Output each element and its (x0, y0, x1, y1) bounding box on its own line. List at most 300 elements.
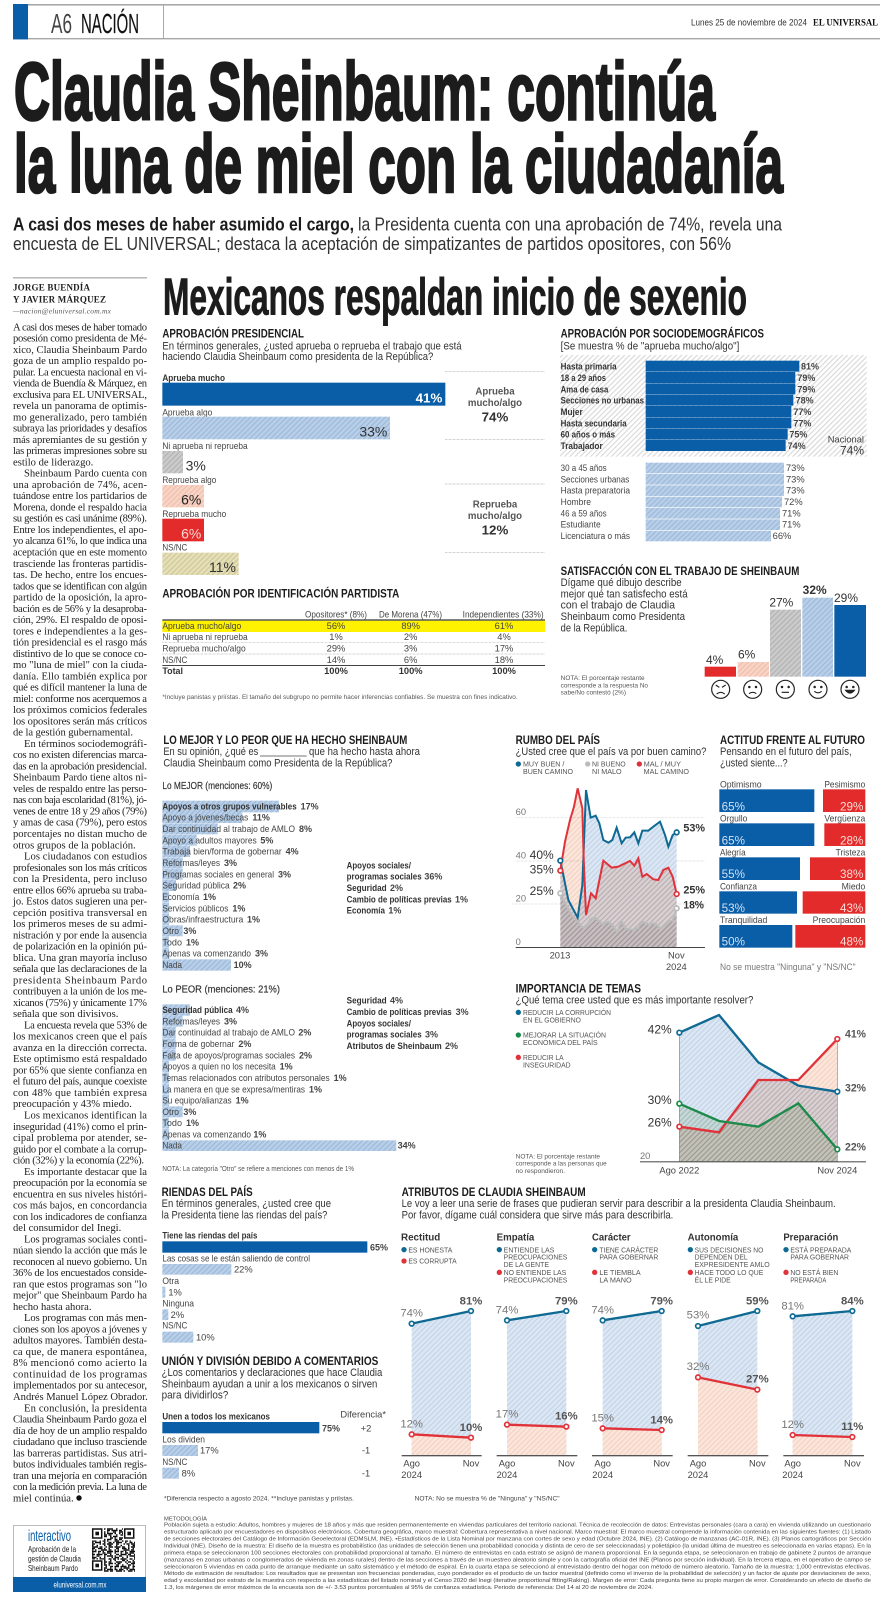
table: 17% (495, 644, 513, 654)
table: 29% (327, 644, 345, 654)
panel: lo mejor y lo peor (162, 734, 469, 1173)
footnote: nota: NOTA: No se muestra % de "Ninguna" y "NS/NC" (415, 1496, 560, 1503)
article body column: exclusiva para EL UNIVERSAL, (13, 390, 147, 401)
chart: rectitud: Nov (463, 1459, 480, 1469)
bar chart: below national: 71% (782, 508, 801, 518)
bar chart: above national: 60 años o más (561, 430, 615, 440)
legend: BUEN CAMINO (523, 767, 573, 776)
line chart: rumbo del país: 20 (516, 894, 526, 904)
bar chart: lo mejor: Trabaja bien/forma de gobernar (162, 847, 282, 857)
table: Independientes (33%) (463, 610, 544, 620)
legend: NI MALO (592, 767, 622, 776)
question: ¿Usted cree que el país va por buen camino? (516, 746, 706, 758)
legend (516, 759, 689, 776)
bar chart: below national: 72% (784, 497, 803, 507)
bar chart: lo peor: Su equipo/alianzas (162, 1096, 232, 1106)
panel: aprobación por sociodemográficos (560, 327, 867, 541)
article body column: presidenta Sheinbaum Pardo (13, 975, 147, 986)
chart: empatía: DE LA GENTE (504, 1260, 549, 1269)
chart: preparación: PREPARADA (790, 1275, 827, 1284)
bar chart: approval: 33% (359, 424, 387, 440)
note: corresponde a la respuesta No (561, 682, 648, 689)
section name: NACIÓN (81, 8, 139, 39)
bar chart: lo mejor: Dar continuidad al trabajo de AMLO (162, 824, 295, 834)
legend: MUY BUEN / (523, 759, 565, 768)
article body column: de la gestión gubernamental. (13, 728, 133, 739)
bar chart: riendas: NS/NC (162, 1321, 188, 1331)
question (402, 1198, 836, 1221)
article body column: por 65% que siente confianza en (13, 1066, 148, 1076)
line chart: importancia de temas: 32% (845, 1083, 866, 1095)
article body column: distintivo de lo que se conoce co- (13, 649, 147, 660)
article body column: reconocen al nuevo gobierno. Un (13, 1257, 148, 1268)
panel: importancia de temas (516, 982, 866, 1175)
diverging bars: sentiments: Tranquilidad (720, 915, 767, 925)
article body column: núan siendo la acción que más le (13, 1246, 147, 1257)
article body column: blica. Una gran mayoría incluso (13, 953, 147, 964)
bar chart: riendas: 1% (168, 1287, 182, 1297)
chart: rectitud: Ago (403, 1459, 420, 1469)
page header strip (13, 4, 880, 39)
bar chart: lo peor: 3% (224, 1016, 237, 1026)
article body column: cepción positiva transversal en (13, 908, 148, 919)
note: NOTA: El porcentaje restante (561, 675, 645, 682)
chart: empatía: Empatía (497, 1233, 535, 1244)
article body column: encuentra en sus niveles históri- (13, 1189, 147, 1200)
icon: blue section block (13, 4, 28, 39)
chart: rectitud (400, 1233, 482, 1480)
chart: empatía: PREOCUPACIONES (504, 1253, 567, 1262)
bar chart: approval: 41% (416, 391, 442, 406)
bar chart: below national: Hasta preparatoria (561, 486, 631, 496)
legend: REDUCIR LA (523, 1053, 564, 1062)
article body column: los mexicanos creen que el país (13, 1032, 147, 1043)
interactive description: gestión de Claudia (28, 1554, 81, 1564)
article body column: trasciende las fronteras partidis- (13, 559, 147, 570)
diverging bars: sentiments: Confianza (720, 881, 758, 891)
subtitle deck (13, 214, 783, 254)
grouped totals: lo mejor: programas sociales (347, 872, 422, 882)
line chart: rumbo del país: 25% (530, 884, 554, 898)
heading: APROBACIÓN PRESIDENCIAL (162, 327, 304, 340)
article body column: ciones son los apoyos a jóvenes y (13, 1324, 148, 1335)
bar chart: unión y división: Los dividen (162, 1434, 205, 1444)
bar chart: lo mejor: Reformas/leyes (162, 858, 220, 868)
chart: preparación: 81% (781, 1300, 804, 1312)
diverging bars: sentiments: 65% (722, 800, 745, 813)
bar chart: below national: 71% (782, 520, 801, 530)
chart: rectitud: Rectitud (401, 1233, 440, 1244)
article body column: subraya las prioridades y desafíos (13, 424, 147, 435)
line chart: rumbo del país: 60 (516, 807, 526, 817)
grouped totals: lo mejor: 2% (390, 883, 403, 893)
bar chart: satisfaction: 32% (803, 583, 827, 597)
legend: NI BUENO (592, 759, 626, 768)
article body column: Es importante destacar que la (24, 1167, 147, 1178)
interactive description: Aprobación de la (28, 1544, 76, 1554)
bar chart: lo mejor: 11% (252, 813, 270, 823)
bar chart: approval: 3% (186, 458, 206, 474)
bar chart: lo mejor: 2% (233, 881, 246, 891)
chart: preparación: 84% (841, 1295, 864, 1307)
methodology block (164, 1516, 872, 1591)
article body column: ca que, de manera espontánea, (13, 1347, 147, 1358)
article body column: mo "luna de miel" con la ciuda- (13, 660, 147, 671)
methodology block: primera etapa se seleccionaron 100 secciones electorales con probabilidad proporcional al tamaño. El número de entrevistas en cada estrato se asignó de manera proporcional. En la segunda etapa, se seleccionaron en trabajo de gabinete 2 puntos de arranque (164, 1550, 871, 1556)
bar chart: lo peor: 1% (309, 1084, 322, 1094)
bar chart: above national (560, 355, 867, 458)
chart: autonomía: SUS DECISIONES NO (695, 1245, 763, 1254)
article body column: más apremiantes de su gestión y (13, 435, 148, 446)
line chart: importancia de temas: 41% (845, 1029, 866, 1041)
question: con el trabajo de Claudia (561, 600, 676, 612)
bar chart: above national: Mujer (561, 407, 583, 417)
table: Total (162, 666, 183, 676)
chart: autonomía: 2024 (688, 1470, 708, 1480)
article body column: Entre los independientes, el apo- (13, 525, 147, 536)
article body column: preocupación por la economía se (13, 1178, 147, 1189)
chart: rectitud: 2024 (401, 1470, 422, 1480)
bar chart: lo mejor: Economía (162, 892, 200, 902)
chart: autonomía (687, 1233, 770, 1480)
heading: ACTITUD FRENTE AL FUTURO (720, 734, 865, 747)
footnote: diferencia: *Diferencia respecto a agosto 2024. **Incluye panistas y priístas. (164, 1496, 354, 1503)
chart: carácter: TIENE CARÁCTER (599, 1245, 659, 1254)
callout: approve / disapprove totals: 74% (482, 410, 508, 425)
interactive description: Sheinbaum Pardo (28, 1563, 78, 1573)
chart: carácter: 74% (591, 1304, 614, 1316)
question (162, 1198, 331, 1221)
article body column: vienda de Buendía & Márquez, en (13, 379, 148, 390)
diverging bars: sentiments: Pesimismo (824, 780, 865, 790)
table: 1% (329, 632, 343, 642)
bar chart: lo peor: 2% (299, 1050, 312, 1060)
table: Opositores* (8%) (305, 610, 367, 620)
methodology block: Individual (INE). Diseño de la muestra: El diseño de la muestra es probabilístico (las unidades de selección tienen una probabilidad conocida y distinta de cero de ser seleccionadas) y polietápico (la unidad última de muestreo es seleccionada en varias etapas). En la (164, 1544, 872, 1550)
article body column: Sheinbaum Pardo tiene altos ni- (13, 773, 147, 784)
article body column: cipal problema por atender, se- (13, 1133, 147, 1144)
note: NOTA: El porcentaje restante (516, 1153, 600, 1160)
question (561, 577, 688, 634)
subheading: lo peor: Lo PEOR (menciones: 21%) (162, 984, 280, 995)
icon: satisfied face (809, 680, 827, 698)
methodology block: METODOLOGÍA (164, 1516, 207, 1523)
article body column: mo generalizado, pero también (13, 412, 148, 423)
panel: aprobación presidencial (162, 327, 545, 575)
byline: Y JAVIER MÁRQUEZ (13, 295, 106, 305)
table: NS/NC (162, 655, 188, 665)
article body column: nistración y por ende la ausencia (13, 930, 147, 941)
article body column: los próximos comicios federales (13, 705, 147, 716)
chart: autonomía: ÉL LE PIDE (695, 1275, 731, 1284)
byline: —nacion@eluniversal.com.mx (12, 307, 112, 316)
article body column: el futuro del país, aunque coexiste (13, 1077, 147, 1088)
chart: carácter: Ago (594, 1459, 611, 1469)
grouped totals: lo peor: Cambio de políticas previas (347, 1007, 452, 1017)
bar chart: lo peor: 1% (236, 1096, 249, 1106)
article body column: goza de un amplio respaldo po- (13, 356, 147, 367)
question: Claudia Sheinbaum como Presidenta de la República? (163, 757, 392, 769)
chart: carácter: PARA GOBERNAR (599, 1253, 659, 1262)
grouped totals: lo peor: 3% (425, 1030, 438, 1040)
article body column: cos más bajos, en concordancia (13, 1201, 147, 1212)
bar chart: above national: 74% (788, 441, 806, 451)
bar chart: unión y división: -1 (362, 1468, 370, 1478)
bar chart: lo mejor: 3% (255, 949, 268, 959)
article body column: y amas de casa (79%), pero estos (13, 818, 147, 829)
national reference label: 74% (840, 444, 864, 458)
grouped totals: lo mejor (347, 860, 468, 916)
question (163, 746, 421, 769)
table: 18% (495, 655, 513, 665)
methodology block: estructurado aplicado por encuestadores en dispositivos electrónicos. Cobertura geográfica, marco muestral: Cobertura representativa a nivel nacional. Marco muestral: El marco muestral comprende la información contenida en las siguientes fuentes: (1) Listado (164, 1530, 871, 1536)
diverging bars: sentiments: Alegría (720, 847, 746, 857)
bar chart: approval: 11% (209, 559, 236, 575)
heading: RIENDAS DEL PAÍS (162, 1186, 253, 1199)
subtitle deck: A casi dos meses de haber asumido el cargo, (13, 214, 354, 235)
table (162, 610, 545, 676)
question: la Presidenta tiene las riendas del país? (162, 1209, 327, 1221)
diverging bars: sentiments: 38% (840, 868, 863, 881)
bar chart: riendas: Tiene las riendas del país (162, 1230, 257, 1240)
table: De Morena (47%) (379, 610, 442, 620)
bar chart: lo peor: 1% (280, 1062, 293, 1072)
table: 100% (324, 666, 349, 676)
bar chart: lo mejor: 1% (203, 892, 216, 902)
panel: aprobación por identificación partidista (162, 587, 545, 701)
grouped totals: lo mejor: 36% (424, 872, 442, 882)
callout: approve / disapprove totals: 12% (482, 523, 508, 538)
methodology block: (manzanas en zonas urbanas o conglomerados de vivienda en zonas rurales) dentro de las secciones a través de un muestreo aleatorio simple y con la cartografía oficial del INE (Planos por sección individual). En la tercera etapa, en el operativo de campo se (164, 1557, 871, 1563)
article body column: A casi dos meses de haber tomado (13, 322, 147, 333)
chart: preparación: NO ESTÁ BIEN (790, 1268, 838, 1277)
chart: rectitud: ES HONESTA (408, 1245, 453, 1254)
bar chart: unión y división: 75% (322, 1423, 340, 1433)
bar chart: lo peor: Falta de apoyos/programas sociales (162, 1050, 295, 1060)
article body column: inseguridad (41%) como el prin- (13, 1122, 147, 1133)
article body column: otros grupos de la población. (13, 840, 136, 851)
chart: autonomía: Ago (690, 1459, 706, 1469)
article body column: Los programas con más men- (24, 1313, 147, 1324)
bar chart: lo mejor: 1% (186, 937, 199, 947)
bar chart: lo peor: 2% (238, 1039, 251, 1049)
chart: carácter: LE TIEMBLA (599, 1268, 641, 1277)
line chart: rumbo del país: 18% (683, 899, 704, 911)
question: ¿Qué tema cree usted que es más importante resolver? (516, 994, 753, 1006)
line chart: importancia de temas (640, 1015, 866, 1175)
article body column: miel continúa. (13, 1493, 74, 1504)
diverging bars: sentiments (719, 780, 866, 949)
chart: rectitud: 10% (460, 1422, 482, 1434)
bar chart: lo peor: 1% (334, 1073, 347, 1083)
table: 2% (404, 632, 417, 642)
subheading: [Se muestra % de "aprueba mucho/algo"] (561, 340, 739, 352)
article body column: ción, 29%. El respaldo de oposi- (13, 615, 147, 626)
article body column: nas con baja escolaridad (81%), jó- (13, 795, 147, 806)
chart: empatía: ENTIENDE LAS (504, 1245, 554, 1254)
article body column: porcentajes no distan mucho de (13, 829, 147, 840)
article body column: con los indicadores de confianza (13, 1212, 147, 1223)
article body column: pular. La encuesta nacional en vi- (13, 367, 147, 378)
bar chart: lo mejor: Apoyo a adultos mayores (162, 835, 257, 845)
article body column: Andrés Manuel López Obrador. (13, 1392, 148, 1403)
bar chart: lo peor: 3% (183, 1107, 196, 1117)
interactive description (28, 1544, 81, 1573)
line chart: rumbo del país: 25% (683, 885, 705, 897)
bar chart: riendas: Otra (162, 1276, 180, 1286)
icon: QR code (91, 1528, 136, 1572)
subheading: lo mejor: Lo MEJOR (menciones: 60%) (162, 781, 272, 792)
bar chart: unión y división: 8% (182, 1468, 195, 1478)
diverging bars: sentiments: 29% (840, 800, 863, 813)
chart: carácter: 79% (650, 1295, 673, 1307)
grouped totals: lo mejor: Apoyos sociales/ (347, 860, 411, 870)
methodology block: Población sujeta a estudio: Adultos, hombres y mujeres de 18 años y más que residen permanentemente en viviendas particulares del territorio nacional. Técnica de recolección de datos: Entrevistas personales (cara a cara) en vivienda utilizando un cuestionario (164, 1523, 871, 1529)
bar chart: lo mejor: Todo (162, 937, 182, 947)
chart: autonomía: 27% (746, 1374, 769, 1386)
bar chart: riendas: 65% (370, 1243, 388, 1253)
bar chart: lo mejor: 17% (301, 801, 319, 811)
legend (516, 1008, 611, 1069)
line chart: rumbo del país: Nov (668, 950, 685, 960)
question (162, 1367, 383, 1402)
article body column: tuándose entre los partidarios de (13, 491, 147, 502)
note: No se muestra "Ninguna" y "NS/NC" (720, 962, 856, 972)
article body column: tión presidencial es el rasgo más (13, 638, 147, 649)
table: 3% (404, 644, 417, 654)
bar chart: lo mejor: 1% (247, 915, 260, 925)
bar chart: lo mejor: 4% (286, 847, 299, 857)
diverging bars: sentiments: 43% (840, 902, 863, 915)
national reference label (828, 435, 864, 458)
bar chart: lo peor: 34% (398, 1141, 416, 1151)
chart: preparación: 11% (841, 1421, 863, 1433)
chart: preparación: Ago (784, 1459, 801, 1469)
bar chart: below national: Hombre (561, 497, 591, 507)
grouped totals: lo peor: 2% (445, 1041, 458, 1051)
bar chart: below national: Estudiante (561, 520, 601, 530)
bar chart: lo peor: 2% (298, 1028, 311, 1038)
question: Sheinbaum ayudan a unir a los mexicanos o sirven (162, 1378, 377, 1390)
subtitle deck: la Presidenta cuenta con una aprobación de 74%, revela una (358, 214, 783, 235)
bar chart: above national: 78% (796, 396, 814, 406)
masthead: EL UNIVERSAL (813, 18, 878, 28)
bar chart: satisfaction: 27% (769, 596, 794, 610)
article body column: señala que son divisivos. (13, 1009, 118, 1020)
chart: empatía (496, 1233, 578, 1480)
question (720, 746, 852, 769)
chart: carácter: Nov (653, 1459, 670, 1469)
diverging bars: sentiments: 65% (722, 834, 745, 847)
article body column: En términos sociodemográfi- (24, 739, 147, 750)
icon: neutral face (776, 680, 794, 698)
article body column: preocupación y 43% miedo. (13, 1099, 132, 1110)
article body column: entre ellos 66% aprueba su traba- (13, 885, 147, 896)
line chart: rumbo del país: 53% (683, 823, 705, 835)
question: Por favor, dígame cuál considera que sirve más para describirla. (402, 1209, 673, 1221)
bar chart: lo mejor: 10% (234, 960, 252, 970)
methodology block: de secciones electorales del Catálogo de Información Geoelectoral (EDMSLM, INE). •Estadísticos de la Lista Nominal por manzana con cortes de sexo y edad (Octubre 2024, INE). (2) Catálogo de manzanas (AC-01R, INE). (3) Planos cartográficos por Sección (164, 1537, 871, 1543)
article body column: butos individuales también regis- (13, 1460, 147, 1471)
chart: autonomía: 32% (687, 1361, 709, 1373)
article body column: xico, Claudia Sheinbaum Pardo (13, 345, 147, 356)
bar chart: unión y división: -1 (362, 1446, 370, 1456)
table: 100% (399, 666, 423, 676)
chart: preparación: 2024 (782, 1470, 803, 1480)
bar chart: above national: Secciones no urbanas (561, 396, 644, 406)
article body column: mejor" que Sheinbaum Pardo ha (13, 1291, 147, 1302)
bar chart: unión y división: 17% (200, 1446, 219, 1456)
article body column: Los ciudadanos con estudios (24, 852, 147, 862)
chart: rectitud: 74% (400, 1308, 423, 1320)
bar chart: lo peor: 1% (253, 1129, 266, 1139)
bar chart: lo mejor: Nada (162, 960, 183, 970)
bar chart: riendas: Las cosas se le están saliendo de control (162, 1253, 310, 1263)
bar chart: above national: Hasta secundaria (561, 418, 627, 428)
article body column: tran una mejoría en comparación (13, 1471, 148, 1482)
chart: empatía: PREOCUPACIONES (504, 1275, 567, 1284)
bar chart: lo peor: Nada (162, 1141, 183, 1151)
chart: empatía: 17% (496, 1409, 518, 1421)
line chart: rumbo del país: 40% (530, 848, 554, 862)
chart: carácter: Carácter (592, 1233, 631, 1244)
table: 89% (401, 621, 420, 631)
panel: satisfacción con el trabajo (561, 565, 866, 698)
bar chart: approval: 6% (181, 492, 201, 508)
article body column: implementados por su antecesor, (13, 1381, 147, 1392)
bar chart: lo peor: La manera en que se expresa/mentiras (162, 1084, 305, 1094)
article body column: das en la aprobación presidencial. (13, 761, 147, 772)
bar chart: lo mejor: 8% (299, 824, 312, 834)
article body column: los primeros meses de su admi- (13, 919, 147, 930)
heading: APROBACIÓN POR SOCIODEMOGRÁFICOS (561, 327, 764, 340)
article body column: tados que se identifican con algún (13, 581, 148, 592)
bar chart: unión y división: NS/NC (162, 1457, 188, 1467)
article body column: jo. Estos datos sugieren una per- (12, 897, 147, 908)
chart: preparación: PARA GOBERNAR (790, 1253, 849, 1262)
icon: very satisfied face (841, 680, 859, 698)
article body column: revela un panorama de optimis- (13, 401, 147, 412)
panel: actitud frente al futuro (719, 734, 866, 972)
panel: riendas del país (162, 1186, 388, 1343)
article body column: partido de la oposición, la apro- (13, 592, 147, 604)
bar chart: lo mejor: 1% (232, 903, 245, 913)
question: Pensando en el futuro del país, (720, 746, 852, 758)
bar chart: lo peor: Apenas va comenzando (162, 1129, 251, 1139)
article body column: Morena, donde el respaldo hacia (13, 502, 147, 514)
bar chart: below national: 73% (786, 486, 805, 496)
article body column: 36% de los encuestados conside- (13, 1268, 147, 1279)
chart: autonomía: EXPRESIDENTE AMLO (695, 1260, 770, 1269)
chart: preparación (781, 1233, 864, 1480)
bar chart: lo mejor: Apoyo a jóvenes/becas (162, 813, 249, 823)
article body column: contribuyen a la unión de los me- (13, 987, 147, 998)
question: En términos generales, ¿usted cree que (162, 1198, 331, 1210)
bar chart: approval: Reprueba mucho (162, 509, 226, 519)
subtitle deck: encuesta de EL UNIVERSAL; destaca la aceptación de simpatizantes de partidos opositores, con 56% (13, 233, 731, 254)
diverging bars: sentiments: 53% (722, 902, 745, 915)
article body column: xicanos (75%) y únicamente 17% (13, 998, 147, 1009)
article body column: continuidad de los programas (13, 1370, 147, 1380)
methodology block: edad y escolaridad por estrato de la muestra con respecto a las estadísticas del listado nominal y el Censo 2020 del Inegi (iterative proportional fitting/Raking). Margen de error: Cada pregunta tiene su propio margen de error. Considerando un efecto de diseño de (164, 1578, 871, 1584)
national reference label: Nacional (828, 435, 864, 445)
interactive heading: interactivo (28, 1528, 71, 1545)
article body column: tores e independientes a la ges- (13, 626, 147, 637)
grouped totals: lo mejor: Economía (347, 906, 386, 916)
bar chart: lo mejor: Obras/infraestructura (162, 915, 244, 925)
article body column: posesión como presidenta de Mé- (13, 334, 147, 345)
article body column: de polarización en la opinión pú- (13, 942, 147, 953)
